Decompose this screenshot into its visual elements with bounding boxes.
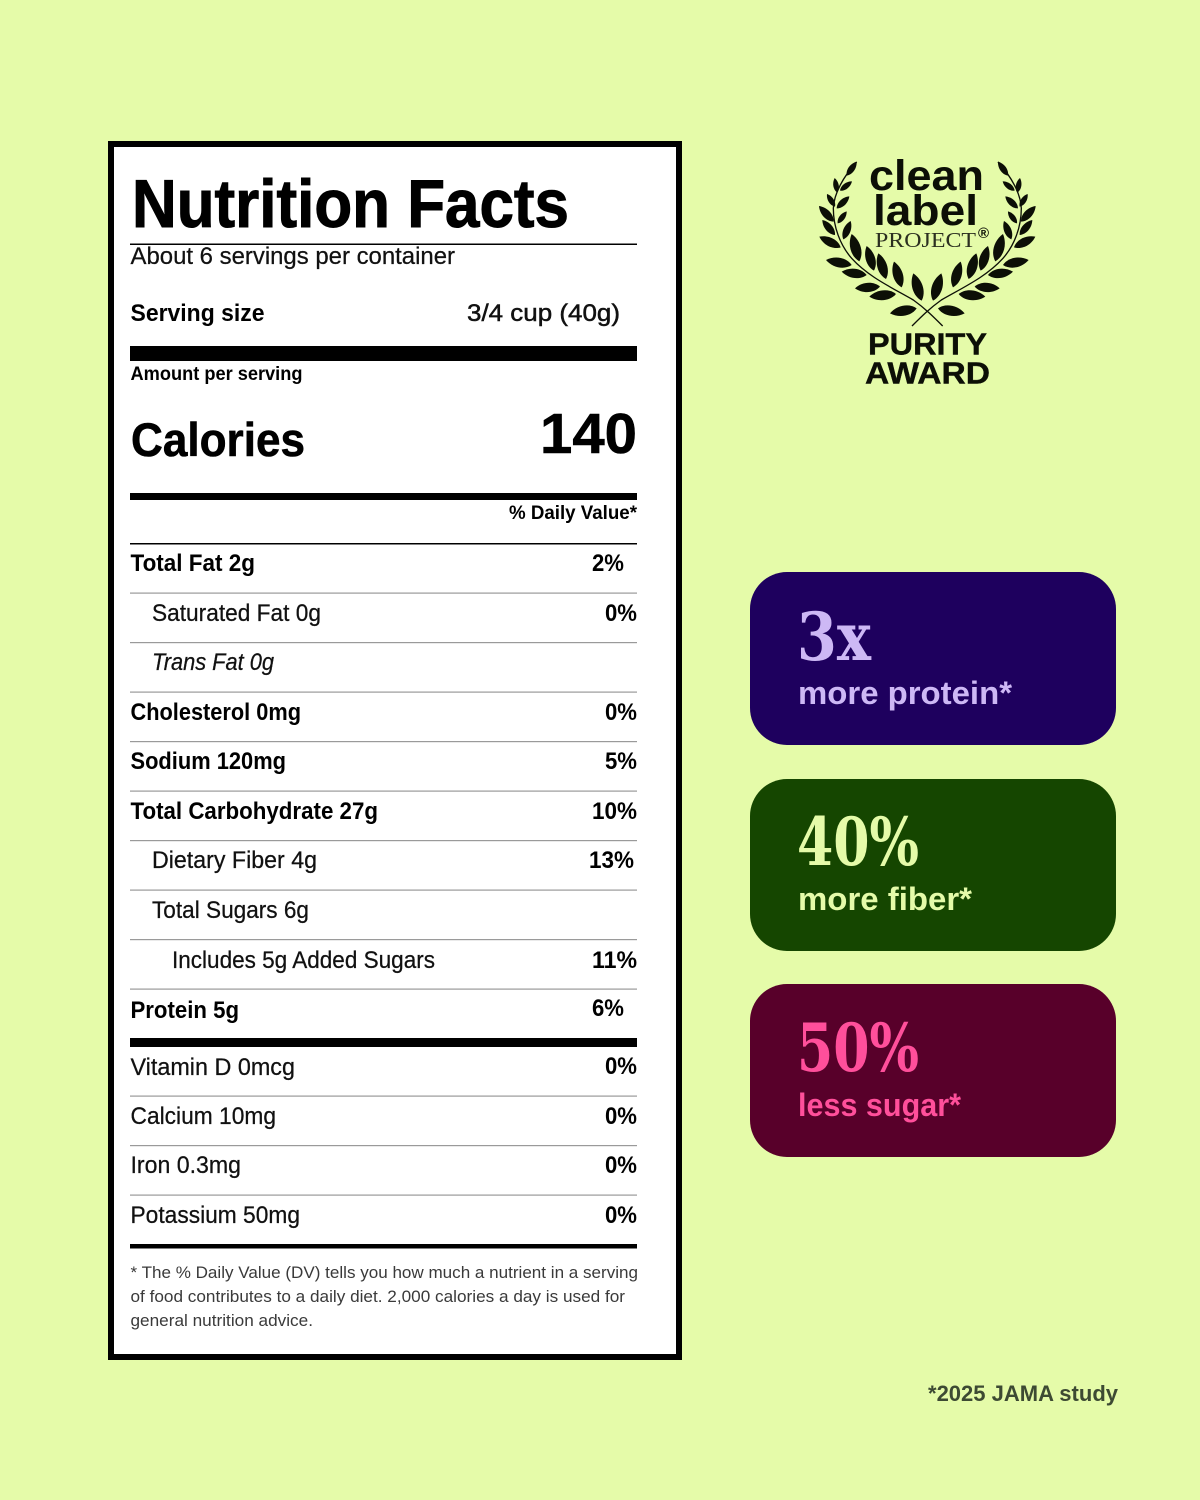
row: vitamin d: 0%	[605, 1053, 637, 1080]
heading: Nutrition Facts: Nutrition Facts	[132, 166, 569, 242]
badge: clean label project purity award	[816, 152, 1039, 390]
row: total sugars: Total Sugars 6g	[152, 897, 309, 924]
row: sodium: Sodium 120mg	[130, 748, 286, 775]
panel: nutrition facts label	[111, 144, 679, 1357]
row: total carbohydrate	[130, 798, 637, 825]
logo text: clean: clean	[869, 152, 984, 200]
row: saturated fat: Saturated Fat 0g	[152, 600, 321, 627]
serving size row: Serving size	[130, 300, 264, 327]
serving size row: 3/4 cup (40g)	[467, 300, 620, 327]
callout: 40% more fiber: 40%	[797, 803, 919, 881]
row: sodium	[130, 748, 637, 775]
row: potassium: Potassium 50mg	[130, 1202, 300, 1229]
logo text: registered mark: ®	[978, 225, 989, 242]
row: iron	[130, 1152, 637, 1179]
callout: 3x more protein	[750, 572, 1116, 745]
servings per container: About 6 servings per container	[130, 243, 455, 270]
row: calcium: 0%	[605, 1103, 637, 1130]
row: total fat	[130, 550, 624, 577]
row: iron: Iron 0.3mg	[130, 1152, 241, 1179]
row: total carbohydrate: 10%	[592, 798, 637, 825]
row: protein	[130, 995, 624, 1024]
logo text: project: PROJECT	[875, 228, 976, 252]
callout: 3x more protein: more protein*	[798, 675, 1013, 711]
daily value footnote: general nutrition advice.	[130, 1311, 313, 1330]
callout: 50% less sugar: less sugar*	[798, 1087, 962, 1123]
row: saturated fat	[152, 600, 637, 627]
row: total fat: Total Fat 2g	[130, 550, 255, 577]
row: cholesterol	[130, 699, 637, 726]
row: protein: Protein 5g	[130, 997, 239, 1024]
row: protein: 6%	[592, 995, 624, 1022]
row: saturated fat: 0%	[605, 600, 637, 627]
callout: 40% more fiber: more fiber*	[798, 881, 973, 917]
logo text: label: label	[873, 187, 978, 235]
row: cholesterol: Cholesterol 0mg	[130, 699, 301, 726]
serving size row	[130, 300, 620, 327]
source note: *2025 JAMA study	[928, 1381, 1119, 1406]
callout: 50% less sugar: 50%	[797, 1009, 919, 1087]
row: dietary fiber: 13%	[589, 847, 634, 874]
row: sodium: 5%	[605, 748, 637, 775]
row: calcium	[130, 1103, 637, 1130]
callout: 40% more fiber	[750, 779, 1116, 951]
row: calcium: Calcium 10mg	[130, 1103, 276, 1130]
row: vitamin d	[130, 1053, 637, 1081]
daily value footnote: of food contributes to a daily diet. 2,000 calories a day is used for	[130, 1287, 625, 1306]
callout: 50% less sugar	[750, 984, 1116, 1157]
row: vitamin d: Vitamin D 0mcg	[130, 1054, 295, 1081]
calories row	[131, 402, 637, 466]
daily value footnote	[130, 1263, 638, 1330]
row: potassium: 0%	[605, 1202, 637, 1229]
row: added sugars: 11%	[592, 947, 637, 974]
percent daily value header: % Daily Value*	[509, 502, 637, 524]
row: iron: 0%	[605, 1152, 637, 1179]
award text: purity: PURITY	[868, 326, 987, 362]
row: dietary fiber: Dietary Fiber 4g	[152, 847, 317, 874]
callout: 3x more protein: 3x	[797, 598, 872, 676]
daily value footnote: * The % Daily Value (DV) tells you how much a nutrient in a serving	[130, 1263, 638, 1282]
row: dietary fiber	[152, 847, 634, 874]
row: total carbohydrate: Total Carbohydrate 27g	[130, 798, 378, 825]
award text: award: AWARD	[865, 356, 990, 390]
row: added sugars	[172, 947, 637, 974]
row: total fat: 2%	[592, 550, 624, 577]
calories row: Calories	[131, 413, 305, 466]
calories row: 140	[540, 402, 637, 466]
amount per serving: Amount per serving	[130, 364, 302, 385]
row: cholesterol: 0%	[605, 699, 637, 726]
row: potassium	[130, 1202, 637, 1229]
row: added sugars: Includes 5g Added Sugars	[172, 947, 435, 974]
row: trans fat: Trans Fat 0g	[152, 649, 274, 676]
icon: laurel wreath	[816, 160, 1039, 326]
